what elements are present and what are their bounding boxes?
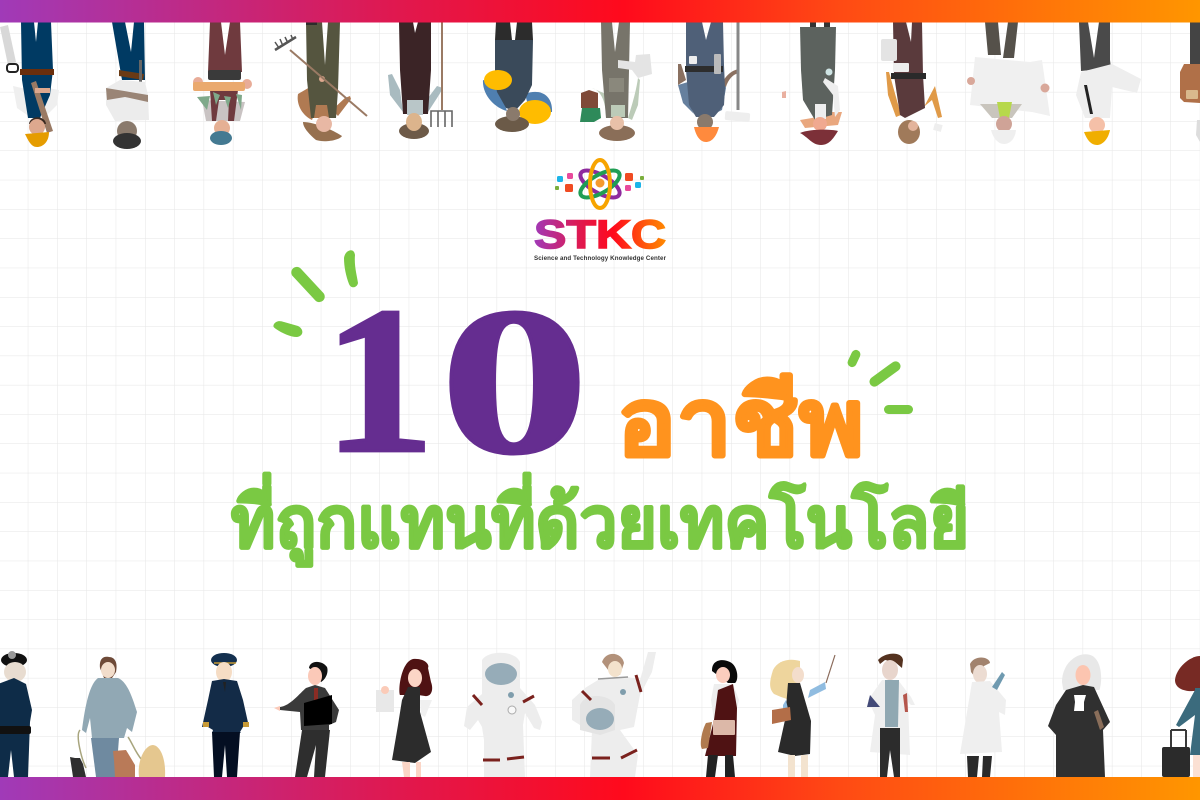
worker: builder with saw xyxy=(0,22,59,147)
worker: courier with bag xyxy=(1180,22,1200,142)
heading number: 10 xyxy=(323,264,589,498)
worker: lecturer with book xyxy=(274,662,339,777)
heading word: อาชีพ: อาชีพ xyxy=(617,370,864,475)
heading number: 10: 1 xyxy=(323,264,435,497)
worker: woman with shoulder bag xyxy=(701,660,739,777)
worker: farmer with rake xyxy=(275,20,367,141)
worker: woman in black dress xyxy=(376,659,432,777)
worker: engineer with blueprint xyxy=(967,22,1050,144)
worker: chemist with flasks xyxy=(867,654,915,777)
worker: doctor scientist xyxy=(960,657,1006,777)
subtitle: ที่ถูกแทนที่ด้วยเทคโนโลยี xyxy=(231,472,969,567)
worker: architect with scroll xyxy=(1076,22,1141,145)
STKC logo xyxy=(534,160,667,262)
top row of upside-down workers xyxy=(0,20,1200,149)
worker: astronaut facing forward xyxy=(464,653,542,777)
worker: painter with roller xyxy=(678,22,750,142)
worker: traveller with suitcase xyxy=(1162,656,1200,777)
accent marks left of number xyxy=(273,250,358,337)
worker: dog walker xyxy=(70,657,165,777)
bottom gradient bar xyxy=(0,777,1200,800)
top gradient bar xyxy=(0,0,1200,22)
worker: waitress with hat xyxy=(782,22,842,145)
accent marks right of heading xyxy=(846,348,913,414)
worker: airline pilot xyxy=(202,653,249,777)
worker: repairman with tool belt xyxy=(106,22,149,149)
worker: teacher with pointer xyxy=(770,655,835,777)
worker: gardener with watering can xyxy=(580,22,652,141)
worker: gardener with planter xyxy=(193,22,252,145)
worker: farmer with pumpkins xyxy=(483,22,552,132)
heading number: 10: 0 xyxy=(440,264,589,498)
worker: astronaut waving xyxy=(572,652,656,777)
worker: janitor with bucket xyxy=(881,22,943,144)
worker: judge in wig and robe xyxy=(1048,656,1110,777)
worker: farmer with pitchfork xyxy=(388,22,452,139)
wordmark: STKC: STKC xyxy=(534,213,666,257)
icon: atom emblem xyxy=(555,160,644,208)
bottom row of standing workers xyxy=(0,651,1200,777)
worker: police officer xyxy=(0,651,32,777)
logo tagline: Science and Technology Knowledge Center xyxy=(534,255,667,262)
